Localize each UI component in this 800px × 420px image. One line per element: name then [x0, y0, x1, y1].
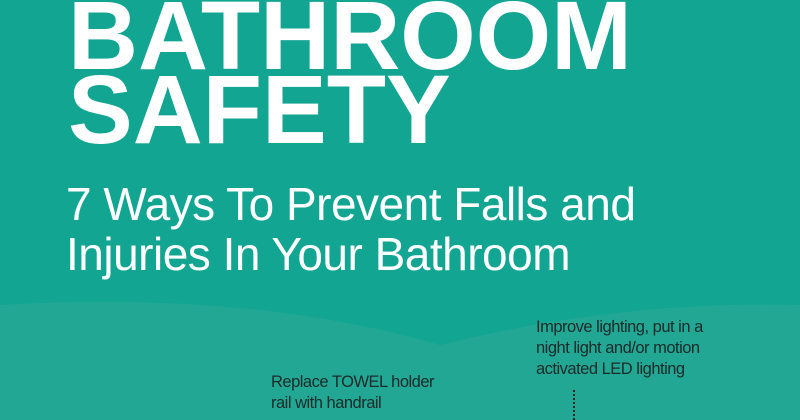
callout: towel rail — [271, 373, 434, 412]
callout: lighting: night light and/or motion — [536, 339, 700, 357]
title — [68, 0, 632, 164]
dotted leader line — [573, 390, 575, 420]
title: SAFETY — [68, 55, 451, 164]
subtitle: 7 Ways To Prevent Falls and — [66, 178, 635, 230]
callout: lighting: Improve lighting, put in a — [536, 318, 703, 336]
callout: lighting: activated LED lighting — [536, 360, 685, 378]
subtitle: Injuries In Your Bathroom — [66, 228, 570, 280]
callout: towel rail: Replace TOWEL holder — [271, 373, 434, 391]
callout: towel rail: rail with handrail — [271, 394, 381, 412]
callout: lighting — [536, 318, 704, 378]
subtitle — [66, 178, 635, 280]
